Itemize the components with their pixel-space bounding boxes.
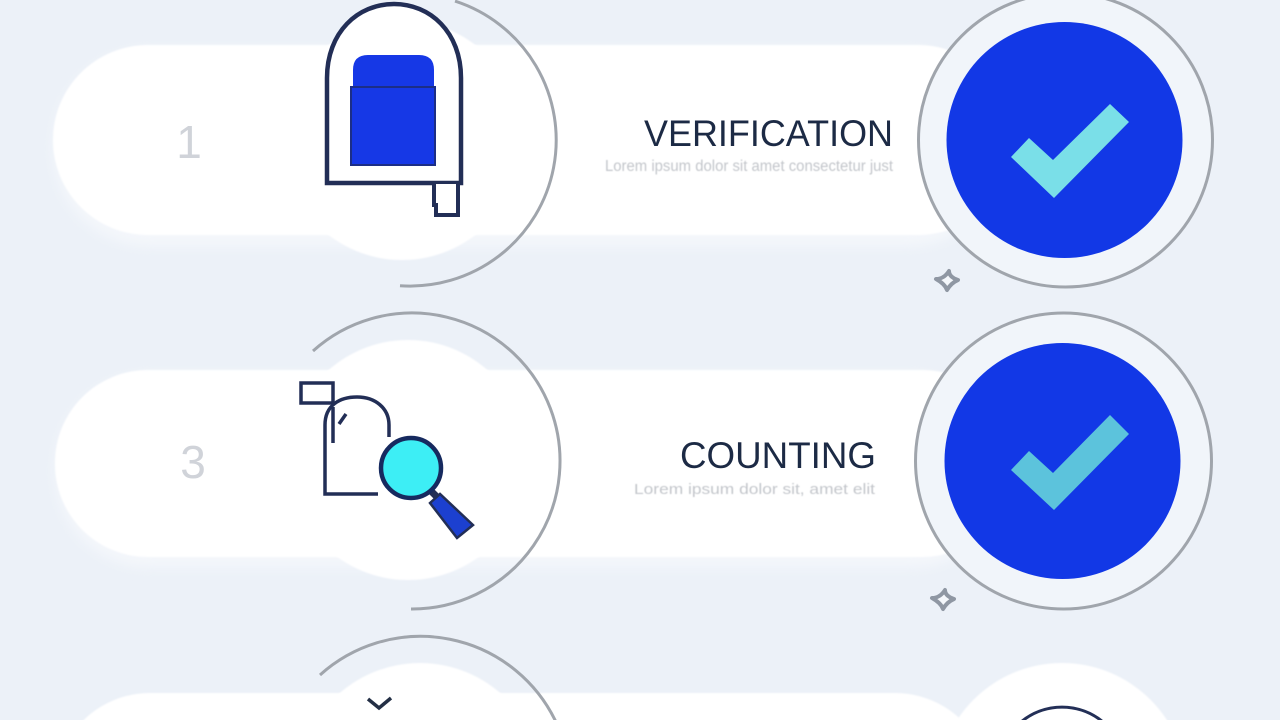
step 2 progress arc	[313, 313, 560, 609]
icon: chevron	[368, 698, 391, 708]
heading: verification: VERIFICATION	[644, 113, 893, 154]
step 1 check badge	[918, 0, 1212, 287]
step 2 pill background	[55, 370, 1015, 557]
panel: step 1 verification	[53, 0, 1212, 290]
heading: counting: COUNTING	[680, 435, 876, 476]
step 2 number: 3	[180, 436, 206, 488]
icon: mailbox ballot box	[327, 4, 461, 215]
step 3 progress arc	[320, 636, 556, 720]
step 1 progress arc	[400, 1, 556, 286]
icon: sparkle	[932, 590, 954, 609]
icon: magnifier over document	[301, 383, 473, 538]
step 3 pill background	[55, 693, 990, 720]
icon: sparkle	[936, 271, 958, 290]
step 1 pill halo	[54, 50, 1004, 246]
step 2 left white circle	[288, 340, 528, 580]
panel: step 2 counting	[55, 313, 1212, 609]
description: verification: Lorem ipsum dolor sit amet consectetur just	[605, 158, 894, 175]
step 1 pill background	[53, 45, 1013, 235]
step 2 check badge	[916, 313, 1212, 609]
step 1 left white circle	[282, 20, 522, 260]
step 3 left white circle	[298, 663, 542, 720]
step 1 number: 1	[176, 116, 202, 168]
step 2 pill halo	[56, 375, 1006, 567]
panel: step 3 partial	[55, 636, 1187, 720]
step 3 badge outline	[1021, 707, 1103, 720]
step 3 right white circle	[937, 663, 1187, 720]
description: counting: Lorem ipsum dolor sit, amet elit	[634, 481, 876, 498]
